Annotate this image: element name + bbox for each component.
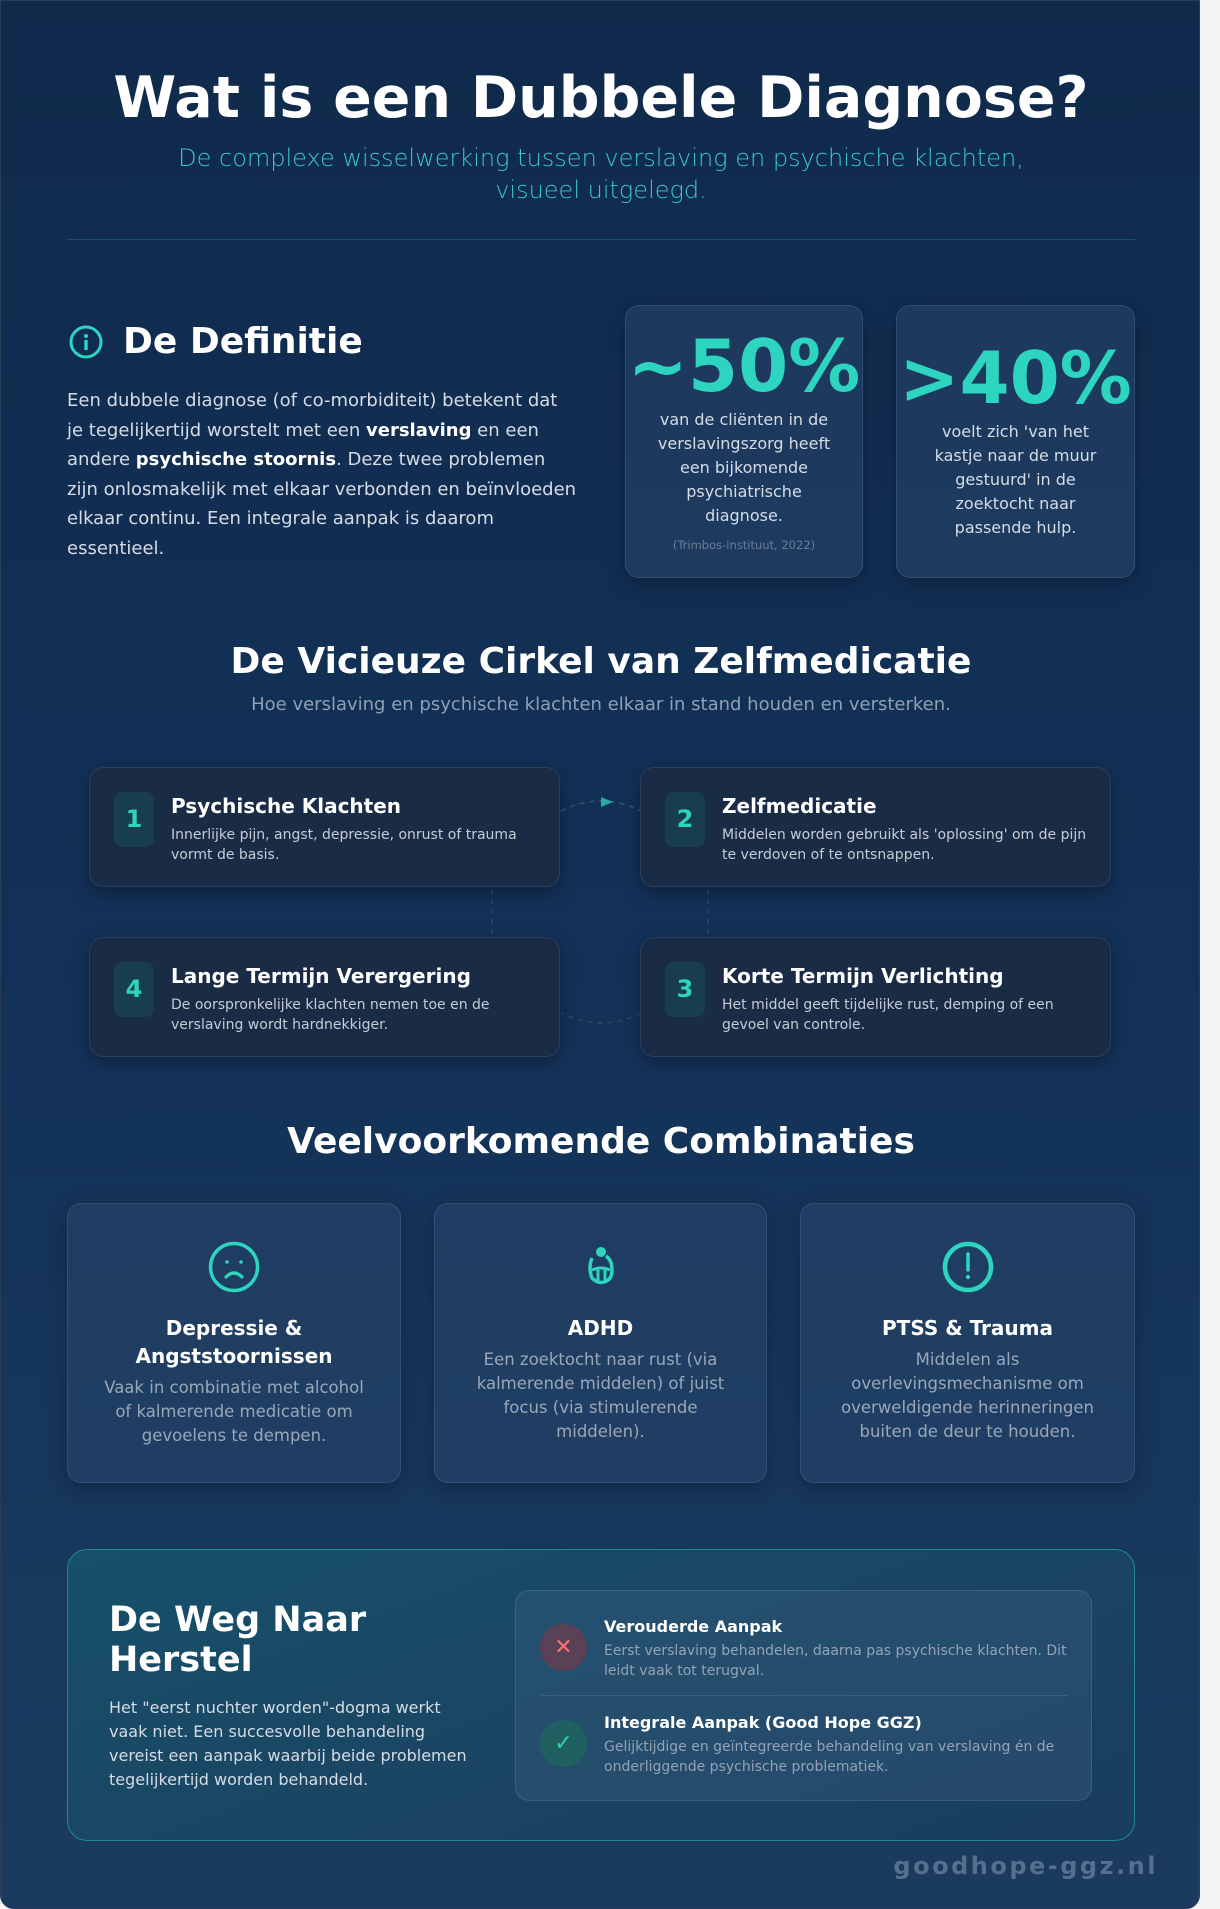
cycle step 2: Middelen worden gebruikt als 'oplossing' om de pijn te verdoven of te ontsnappen. [722, 827, 1086, 863]
cycle step 4: 4 [126, 975, 142, 1003]
panel: herstel [67, 1549, 1135, 1841]
stat card: 40%: voelt zich 'van het kastje naar de muur gestuurd' in de zoektocht naar passende hulp. [935, 422, 1096, 537]
stat card: 40%: >40% [899, 336, 1132, 420]
definition text: Een dubbele diagnose (of co-morbiditeit) betekent dat je tegelijkertijd worstelt met een verslaving en een andere psychische stoornis. Deze twee problemen zijn onlosmakelijk met elkaar verbonden en beïnvloeden elkaar continu. Een integrale aanpak is daarom essentieel. [67, 390, 576, 558]
item: integrale aanpak: ✓ [554, 1731, 573, 1756]
cycle step 2 [640, 767, 1111, 887]
subtitle: De complexe wisselwerking tussen verslaving en psychische klachten, [178, 144, 1024, 172]
comparison box [515, 1590, 1092, 1801]
text herstel: Het "eerst nuchter worden"-dogma werkt vaak niet. Een succesvolle behandeling vereist een aanpak waarbij beide problemen tegelijkertijd worden behandeld. [109, 1698, 467, 1789]
title: Wat is een Dubbele Diagnose? [113, 65, 1089, 131]
cycle step 1 [89, 767, 560, 887]
card: depressie: Angststoornissen [135, 1344, 332, 1368]
cycle step 1: Innerlijke pijn, angst, depressie, onrust of trauma vormt de basis. [171, 827, 517, 863]
card: PTSS: Middelen als overlevingsmechanisme om overweldigende herinneringen buiten de deur te houden. [841, 1350, 1094, 1441]
footer url: goodhope-ggz.nl [893, 1852, 1158, 1880]
cycle step 4: De oorspronkelijke klachten nemen toe en de verslaving wordt hardnekkiger. [171, 997, 490, 1033]
item: verouderde aanpak: Eerst verslaving behandelen, daarna pas psychische klachten. Dit leidt vaak tot terugval. [604, 1643, 1067, 1679]
card: PTSS [800, 1203, 1135, 1483]
cycle step 2: 2 [677, 805, 693, 833]
stat card: 50% [625, 305, 863, 578]
cycle step 1: Psychische Klachten [171, 794, 401, 818]
icon: alert [942, 1242, 994, 1292]
cycle step 3 [640, 937, 1111, 1057]
heading: combinaties: Veelvoorkomende Combinaties [287, 1121, 915, 1162]
arrows: cycle connectors [491, 797, 709, 1024]
cycle step 2: Zelfmedicatie [722, 794, 877, 818]
item: integrale aanpak [540, 1713, 1054, 1775]
cycle step 4 [89, 937, 560, 1057]
item: integrale aanpak: Gelijktijdige en geïntegreerde behandeling van verslaving én de onderliggende psychische problematiek. [604, 1739, 1054, 1775]
icon: brain [588, 1247, 614, 1284]
heading: De Definitie: De Definitie [123, 321, 363, 362]
card: ADHD: ADHD [568, 1316, 633, 1340]
subtitle cirkel: Hoe verslaving en psychische klachten elkaar in stand houden en versterken. [251, 694, 951, 715]
heading herstel [109, 1600, 366, 1680]
heading herstel: De Weg Naar [109, 1600, 366, 1640]
subtitle: visueel uitgelegd. [495, 176, 707, 204]
cycle step 1: 1 [126, 805, 142, 833]
item: verouderde aanpak [540, 1617, 1067, 1679]
cycle step 3: Het middel geeft tijdelijke rust, demping of een gevoel van controle. [722, 997, 1054, 1033]
card: depressie: Vaak in combinatie met alcohol of kalmerende medicatie om gevoelens te dempen. [104, 1378, 364, 1445]
item: verouderde aanpak: ✕ [554, 1635, 573, 1660]
stat card: 40% [896, 305, 1135, 578]
item: verouderde aanpak: Verouderde Aanpak [604, 1617, 782, 1636]
cycle step 3: Korte Termijn Verlichting [722, 964, 1004, 988]
card: PTSS: PTSS & Trauma [882, 1316, 1053, 1340]
stat card: 50%: ~50% [628, 324, 860, 408]
heading: vicieuze cirkel: De Vicieuze Cirkel van Zelfmedicatie [231, 641, 971, 682]
card: depressie [67, 1203, 401, 1483]
subtitle [178, 144, 1024, 204]
card: ADHD [434, 1203, 767, 1483]
item: integrale aanpak: Integrale Aanpak (Good Hope GGZ) [604, 1713, 922, 1732]
heading herstel: Herstel [109, 1640, 253, 1680]
icon: sad face [208, 1242, 260, 1292]
icon: info [70, 326, 102, 358]
stat card: 50%: (Trimbos-instituut, 2022) [673, 538, 815, 552]
stat card: 50%: van de cliënten in de verslavingszorg heeft een bijkomende psychiatrische diagnose. [658, 410, 830, 525]
cycle step 4: Lange Termijn Verergering [171, 964, 471, 988]
cycle step 3: 3 [677, 975, 693, 1003]
card: ADHD: Een zoektocht naar rust (via kalmerende middelen) of juist focus (via stimulerende middelen). [477, 1350, 724, 1441]
card: depressie: Depressie & [166, 1316, 302, 1340]
